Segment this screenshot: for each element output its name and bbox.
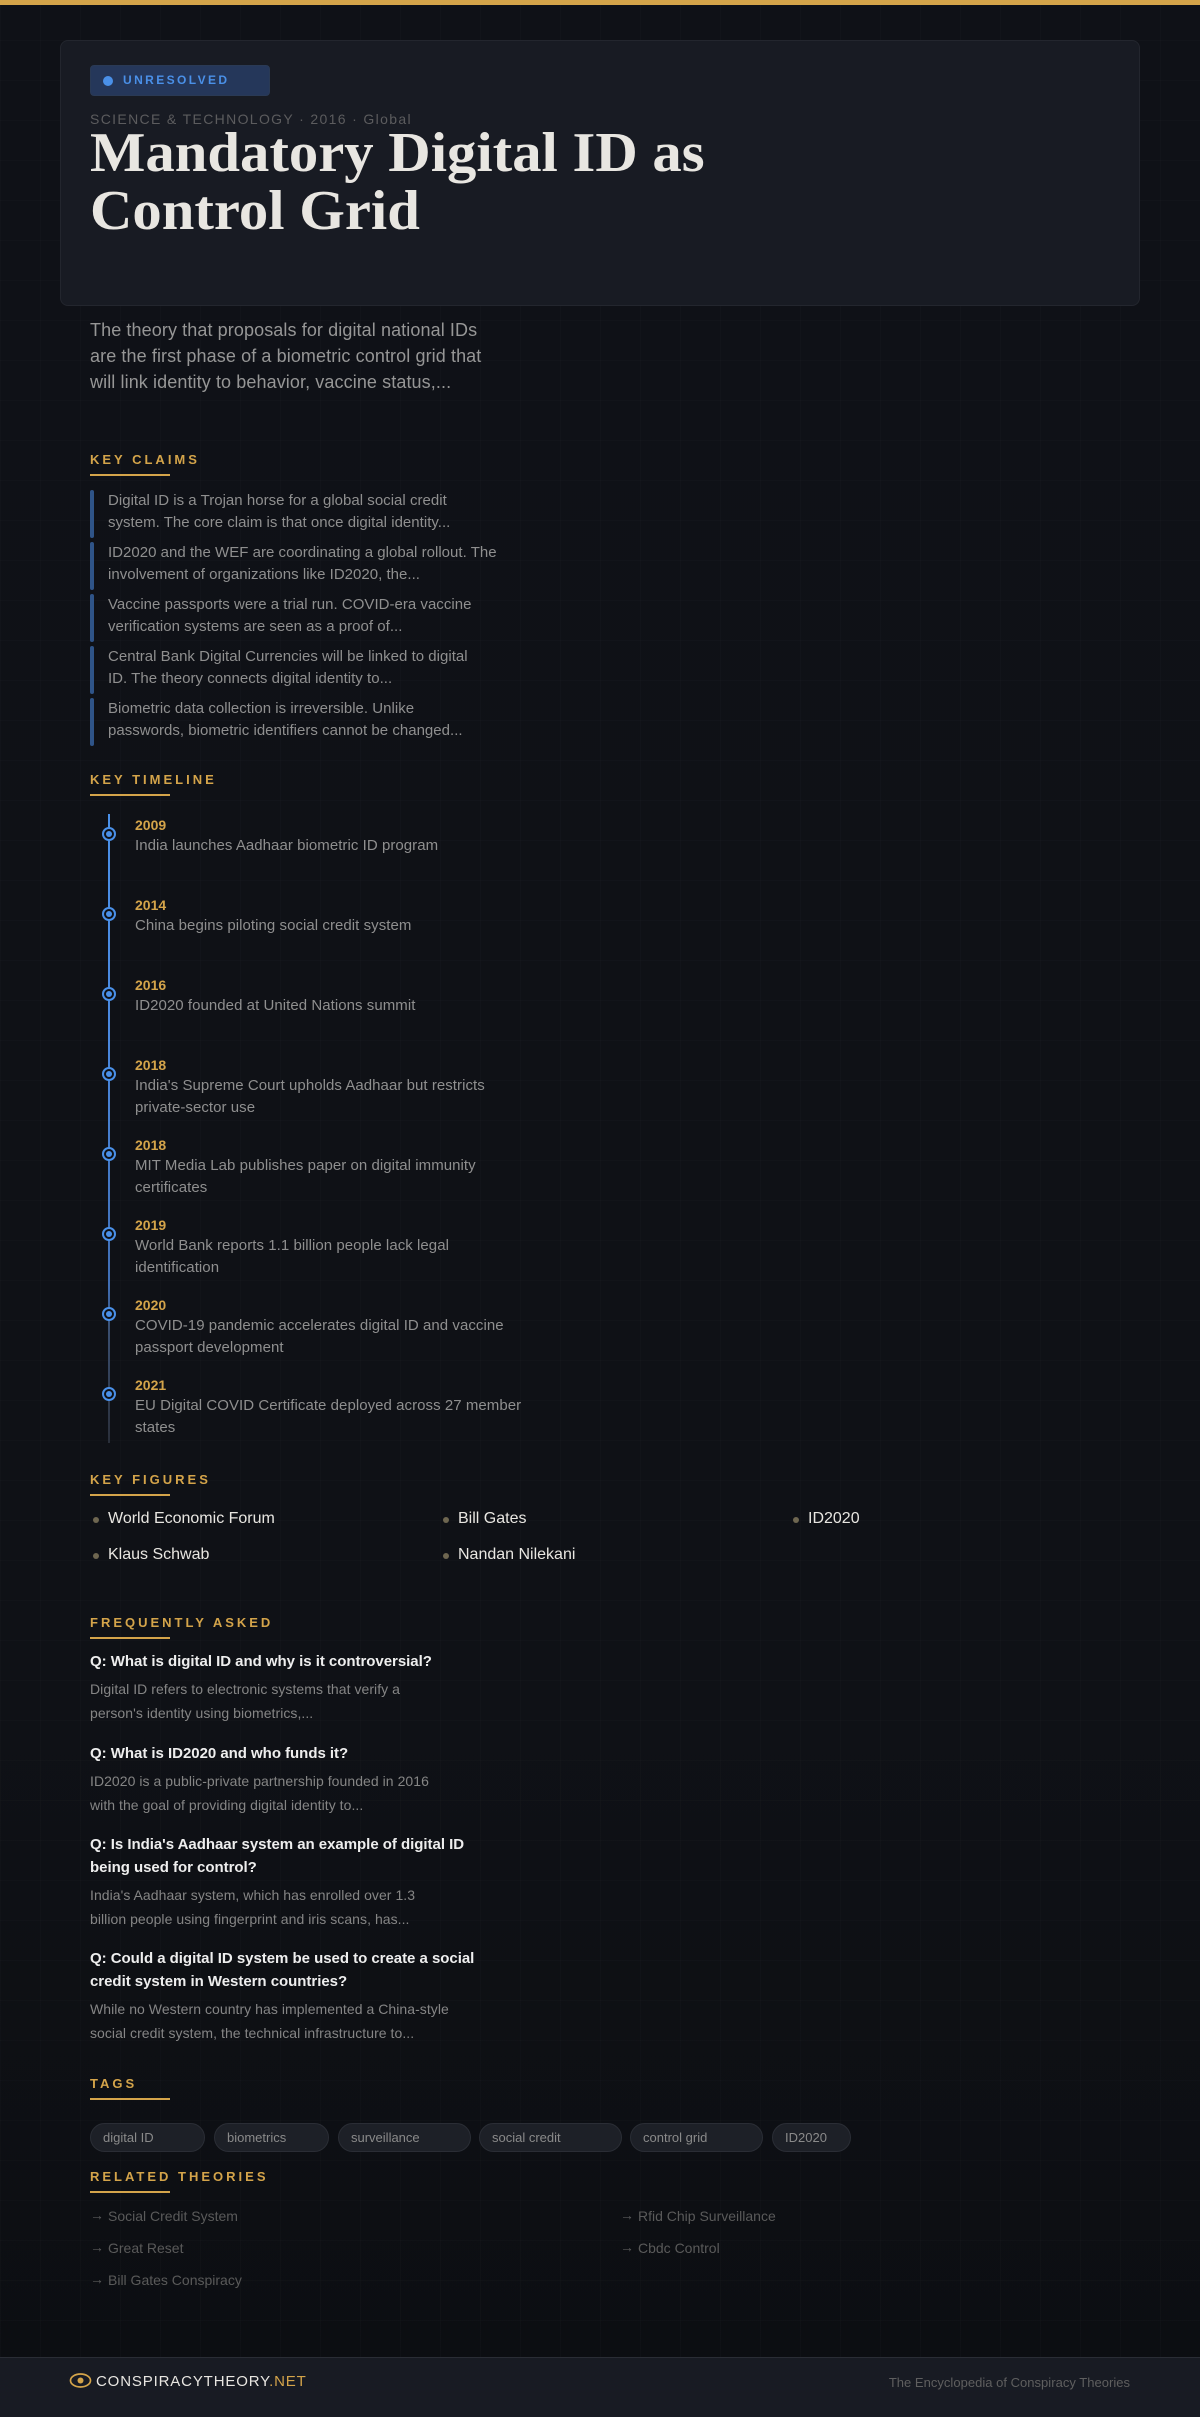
- tag: biometrics: biometrics: [227, 2130, 286, 2145]
- badge label: UNRESOLVED: [123, 73, 229, 87]
- event 2009: India launches Aadhaar biometric ID program: [135, 837, 438, 854]
- question: [90, 1950, 474, 1990]
- answer: with the goal of providing digital identity to...: [90, 1797, 363, 1813]
- event 2018 Supreme Court: India's Supreme Court upholds Aadhaar but restricts: [135, 1077, 485, 1094]
- section heading: key timeline: KEY TIMELINE: [90, 772, 217, 787]
- claim 3: Vaccine passports were a trial run. COVID-era vaccine: [108, 596, 471, 613]
- FAQ 3: [90, 1836, 464, 1927]
- title: Mandatory Digital ID as: [90, 122, 705, 184]
- event 2021: 2021: [135, 1377, 166, 1393]
- claim 5: [90, 698, 463, 746]
- footer: [0, 2357, 1200, 2417]
- event 2009: [102, 817, 438, 854]
- event 2018 Supreme Court: private-sector use: [135, 1099, 255, 1116]
- claim 5: passwords, biometric identifiers cannot be changed...: [108, 722, 463, 739]
- link: Bill Gates Conspiracy: Bill Gates Conspiracy: [108, 2272, 242, 2288]
- title: Control Grid: [90, 180, 420, 242]
- event 2016: 2016: [135, 977, 166, 993]
- icon: status dot: [103, 76, 113, 86]
- status badge: [90, 65, 270, 96]
- category meta line: SCIENCE & TECHNOLOGY · 2016 · Global: [90, 111, 412, 127]
- event 2014: 2014: [135, 897, 166, 913]
- claim 2: [90, 542, 497, 590]
- summary text: are the first phase of a biometric control grid that: [90, 346, 481, 366]
- panel: key figures: [93, 1510, 860, 1563]
- tag: digital ID: [90, 2123, 205, 2152]
- chart: timeline: [102, 814, 521, 1443]
- event 2014: China begins piloting social credit system: [135, 917, 411, 934]
- link: Cbdc Control: →: [620, 2239, 634, 2255]
- answer: Digital ID refers to electronic systems that verify a: [90, 1681, 400, 1697]
- panel: header card: [60, 40, 1140, 306]
- claim 3: verification systems are seen as a proof of...: [108, 618, 402, 635]
- event 2019: World Bank reports 1.1 billion people lack legal: [135, 1237, 449, 1254]
- tag: social credit: social credit: [492, 2130, 561, 2145]
- FAQ 2: [90, 1745, 429, 1813]
- event 2014: [102, 897, 411, 934]
- question: Q: What is ID2020 and who funds it?: [90, 1745, 348, 1762]
- tag: control grid: control grid: [643, 2130, 707, 2145]
- link: Great Reset: Great Reset: [108, 2240, 183, 2256]
- question: [90, 1836, 464, 1876]
- tag: surveillance: [338, 2123, 471, 2152]
- section heading: related theories: RELATED THEORIES: [90, 2169, 268, 2184]
- claim 4: Central Bank Digital Currencies will be linked to digital: [108, 648, 468, 665]
- link: Rfid Chip Surveillance: Rfid Chip Surveillance: [638, 2208, 776, 2224]
- question: credit system in Western countries?: [90, 1973, 347, 1990]
- panel: tags: [90, 2123, 851, 2152]
- answer: [90, 1773, 429, 1813]
- answer: ID2020 is a public-private partnership founded in 2016: [90, 1773, 429, 1789]
- title: [90, 122, 705, 242]
- event 2019: 2019: [135, 1217, 166, 1233]
- tag: ID2020: [772, 2123, 851, 2152]
- timeline axis: [108, 814, 110, 1443]
- link: Social Credit System: Social Credit System: [108, 2208, 238, 2224]
- event 2018 Supreme Court: [102, 1057, 485, 1116]
- figure: Nandan Nilekani: Nandan Nilekani: [458, 1546, 575, 1563]
- section heading: frequently asked: FREQUENTLY ASKED: [90, 1615, 273, 1630]
- tag: ID2020: ID2020: [785, 2130, 827, 2145]
- FAQ 4: [90, 1950, 474, 2041]
- figure: World Economic Forum: World Economic Forum: [108, 1510, 275, 1527]
- summary text: The theory that proposals for digital national IDs: [90, 320, 477, 340]
- question: Q: What is digital ID and why is it controversial?: [90, 1653, 432, 1670]
- section heading: tags: TAGS: [90, 2076, 137, 2091]
- event 2018 MIT: 2018: [135, 1137, 166, 1153]
- icon: eye logo: [69, 2372, 92, 2389]
- link: Rfid Chip Surveillance: →: [620, 2207, 634, 2223]
- claim 4: ID. The theory connects digital identity to...: [108, 670, 392, 687]
- answer: billion people using fingerprint and iris scans, has...: [90, 1911, 410, 1927]
- figure: ID2020: ID2020: [808, 1510, 860, 1527]
- claim 2: ID2020 and the WEF are coordinating a global rollout. The: [108, 544, 497, 561]
- event 2018 MIT: MIT Media Lab publishes paper on digital immunity: [135, 1157, 476, 1174]
- section heading: key figures: KEY FIGURES: [90, 1472, 211, 1487]
- event 2016: ID2020 founded at United Nations summit: [135, 997, 415, 1014]
- question: Q: Is India's Aadhaar system an example of digital ID: [90, 1836, 464, 1853]
- event 2018 Supreme Court: 2018: [135, 1057, 166, 1073]
- claim 3: [90, 594, 471, 642]
- claim 5: Biometric data collection is irreversible. Unlike: [108, 700, 414, 717]
- figure: Bill Gates: Bill Gates: [458, 1510, 526, 1527]
- tag: social credit: [479, 2123, 622, 2152]
- link: Great Reset: [90, 2238, 183, 2258]
- summary text: will link identity to behavior, vaccine status,...: [90, 372, 451, 392]
- brand name: CONSPIRACYTHEORY.NET: [96, 2373, 307, 2390]
- claim 1: system. The core claim is that once digital identity...: [108, 514, 450, 531]
- question: being used for control?: [90, 1859, 257, 1876]
- claim 1: [90, 490, 450, 538]
- answer: While no Western country has implemented a China-style: [90, 2001, 449, 2017]
- event 2021: [102, 1377, 521, 1436]
- event 2021: states: [135, 1419, 175, 1436]
- FAQ 1: [90, 1653, 432, 1721]
- section heading: key claims: KEY CLAIMS: [90, 452, 200, 467]
- event 2020: [102, 1297, 504, 1356]
- tag: surveillance: surveillance: [351, 2130, 420, 2145]
- event 2016: [102, 977, 416, 1014]
- tag: biometrics: [214, 2123, 329, 2152]
- claim 4: [90, 646, 468, 694]
- summary text: [90, 320, 482, 392]
- link: Cbdc Control: Cbdc Control: [638, 2240, 720, 2256]
- event 2018 MIT: [102, 1137, 476, 1196]
- link: Great Reset: →: [90, 2239, 104, 2255]
- event 2019: identification: [135, 1259, 219, 1276]
- claim 1: Digital ID is a Trojan horse for a global social credit: [108, 492, 447, 509]
- event 2019: [102, 1217, 449, 1276]
- event 2020: passport development: [135, 1339, 284, 1356]
- event 2018 MIT: certificates: [135, 1179, 207, 1196]
- answer: India's Aadhaar system, which has enrolled over 1.3: [90, 1887, 415, 1903]
- answer: social credit system, the technical infrastructure to...: [90, 2025, 414, 2041]
- answer: [90, 2001, 449, 2041]
- top accent bar: [0, 0, 1200, 5]
- answer: [90, 1887, 415, 1927]
- figure: Klaus Schwab: Klaus Schwab: [108, 1546, 209, 1563]
- panel: key claims list: [90, 490, 497, 746]
- answer: [90, 1681, 400, 1721]
- question: Q: Could a digital ID system be used to create a social: [90, 1950, 474, 1967]
- event 2021: EU Digital COVID Certificate deployed across 27 member: [135, 1397, 521, 1414]
- event 2020: 2020: [135, 1297, 166, 1313]
- tag: control grid: [630, 2123, 763, 2152]
- tag: digital ID: digital ID: [103, 2130, 154, 2145]
- tagline: The Encyclopedia of Conspiracy Theories: [889, 2375, 1130, 2390]
- event 2020: COVID-19 pandemic accelerates digital ID and vaccine: [135, 1317, 504, 1334]
- link: Social Credit System: →: [90, 2207, 104, 2223]
- claim 2: involvement of organizations like ID2020, the...: [108, 566, 420, 583]
- link: Bill Gates Conspiracy: →: [90, 2271, 104, 2287]
- event 2009: 2009: [135, 817, 166, 833]
- link: Cbdc Control: [620, 2238, 720, 2258]
- panel: related theories: [90, 2206, 790, 2290]
- answer: person's identity using biometrics,...: [90, 1705, 313, 1721]
